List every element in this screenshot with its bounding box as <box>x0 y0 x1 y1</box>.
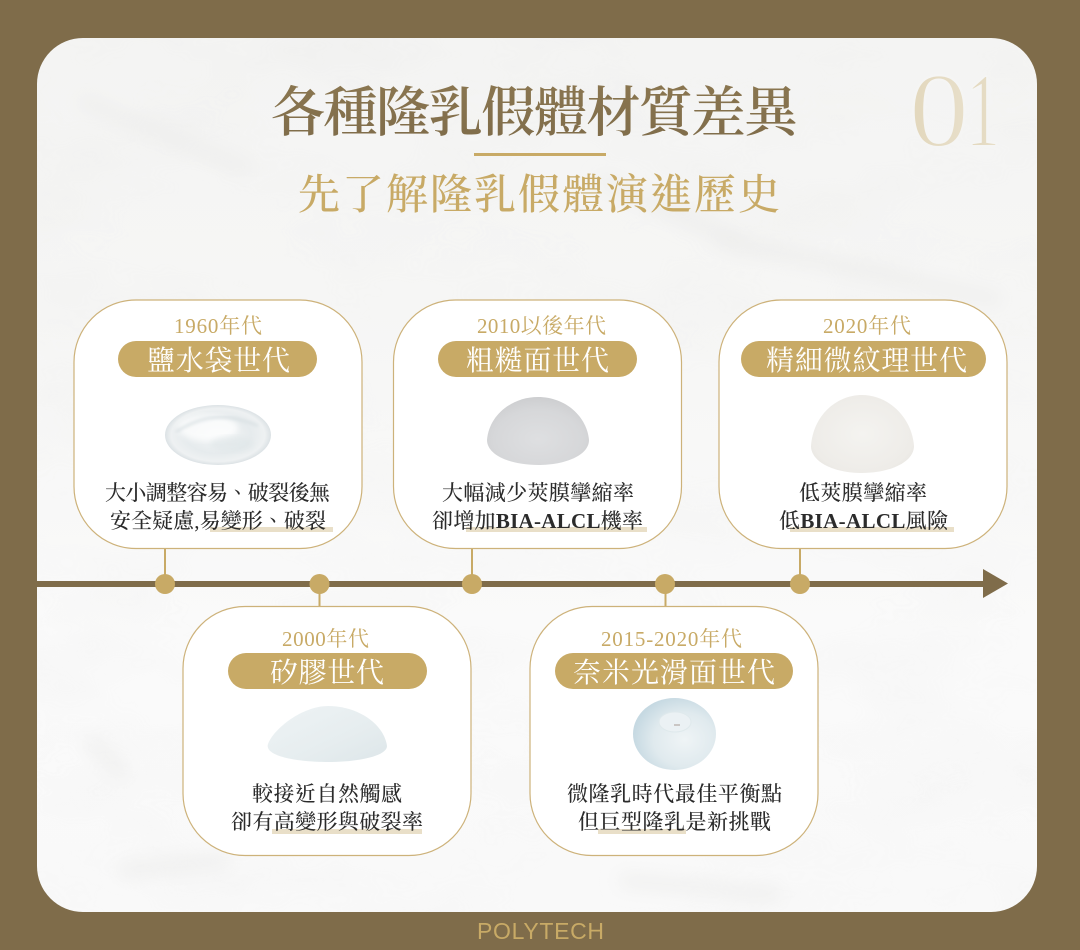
icon: textured implant <box>487 397 589 465</box>
icon: saline implant <box>165 405 271 465</box>
highlight <box>598 829 686 834</box>
year label: 2015-2020年代 <box>601 627 742 651</box>
panel: 2010s textured generation <box>394 300 682 548</box>
year label: 2010以後年代 <box>477 314 606 338</box>
section number: 1 <box>966 52 1000 169</box>
highlight <box>210 527 333 532</box>
panel: 1960s saline generation <box>74 300 362 548</box>
generation pill <box>118 341 317 377</box>
generation pill <box>228 653 427 689</box>
icon: nano smooth implant <box>633 698 716 770</box>
description <box>779 481 949 533</box>
title: 各種隆乳假體材質差異 <box>271 83 802 143</box>
generation pill: 精細微紋理世代 <box>766 345 967 377</box>
description: 安全疑慮,易變形、破裂 <box>110 509 326 533</box>
description: 但巨型隆乳是新挑戰 <box>578 810 771 834</box>
description: 微隆乳時代最佳平衡點 <box>567 782 782 806</box>
description <box>432 481 643 533</box>
section number <box>909 52 1000 169</box>
icon: micro-texture implant <box>811 395 914 473</box>
year label: 2000年代 <box>282 627 369 651</box>
timeline connectors <box>164 545 801 614</box>
description: 低BIA-ALCL風險 <box>779 509 949 533</box>
description <box>567 782 782 834</box>
panel: 2015-2020 nano smooth generation <box>530 606 818 856</box>
panel: 2020s fine micro-texture generation <box>719 300 1007 548</box>
description: 較接近自然觸感 <box>252 782 402 806</box>
description: 大幅減少莢膜攣縮率 <box>442 481 634 505</box>
timeline dots <box>155 574 810 594</box>
year label: 2020年代 <box>823 314 911 338</box>
description <box>231 782 423 834</box>
highlight <box>272 829 422 834</box>
highlight <box>790 527 954 532</box>
description: 大小調整容易、破裂後無 <box>105 481 331 505</box>
panel: 2000s silicone generation <box>183 606 471 856</box>
generation pill: 粗糙面世代 <box>466 345 609 377</box>
highlight <box>466 527 647 532</box>
icon: silicone implant <box>268 706 387 762</box>
generation pill: 矽膠世代 <box>270 657 384 689</box>
section number: 0 <box>909 52 969 169</box>
brand footer: POLYTECH <box>477 918 604 944</box>
generation pill: 奈米光滑面世代 <box>573 657 775 689</box>
description <box>105 481 331 533</box>
description: 低莢膜攣縮率 <box>799 481 927 505</box>
title divider <box>474 153 606 156</box>
timeline arrow <box>37 569 1008 598</box>
subtitle: 先了解隆乳假體演進歷史 <box>298 172 780 219</box>
generation pill <box>438 341 637 377</box>
year label: 1960年代 <box>174 314 262 338</box>
generation pill: 鹽水袋世代 <box>147 345 290 377</box>
description: 卻有高變形與破裂率 <box>231 810 423 834</box>
description: 卻增加BIA-ALCL機率 <box>432 509 643 533</box>
